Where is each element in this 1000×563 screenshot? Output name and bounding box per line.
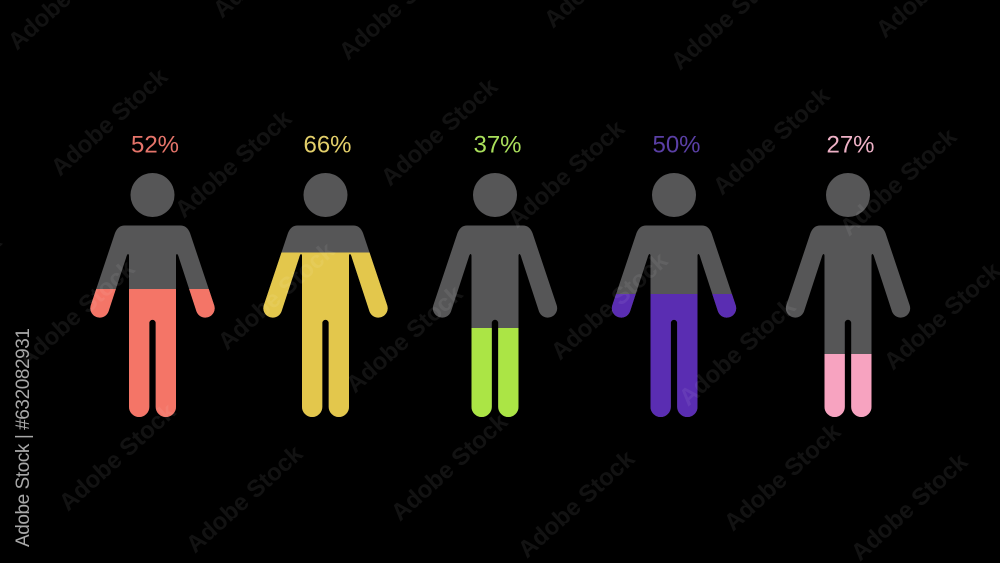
watermarks: Adobe Stock xyxy=(13,255,141,373)
body 3 base xyxy=(433,226,557,417)
head 2 xyxy=(304,173,348,217)
person 3: 37% xyxy=(433,132,557,417)
head 4 xyxy=(652,173,696,217)
watermarks: Adobe Stock xyxy=(503,115,631,233)
head 1 xyxy=(130,173,174,217)
label: 50%: 50% xyxy=(652,132,701,158)
head 5 xyxy=(826,173,870,217)
person 1: 52% xyxy=(90,132,215,417)
person 5: 27% xyxy=(786,132,910,417)
watermarks: Adobe Stock xyxy=(54,398,182,516)
side credit text: Adobe Stock | #632082931 xyxy=(13,328,34,547)
person 4: 50% xyxy=(612,132,736,417)
body 4 base xyxy=(612,226,736,417)
person 2: 66% xyxy=(263,132,388,417)
body 5 base xyxy=(786,226,910,417)
watermarks: Adobe Stock xyxy=(719,418,847,536)
watermarks: Adobe Stock xyxy=(513,445,641,563)
watermarks: Adobe Stock xyxy=(376,73,504,191)
body 1 base xyxy=(90,226,215,417)
watermarks: Adobe Stock xyxy=(846,448,974,563)
watermarks: Adobe Stock xyxy=(341,280,469,398)
body 2 base xyxy=(263,226,388,417)
label: 27%: 27% xyxy=(826,132,875,158)
watermarks: Adobe Stock xyxy=(674,293,802,411)
body 4 fill level xyxy=(612,294,736,417)
watermarks: Adobe Stock xyxy=(181,440,309,558)
watermarks: Adobe Stock xyxy=(170,105,298,223)
body 5 fill level xyxy=(824,354,872,417)
head 3 xyxy=(473,173,517,217)
label: 52%: 52% xyxy=(131,132,179,158)
body 2 fill level xyxy=(263,252,388,417)
label: 37%: 37% xyxy=(473,132,522,158)
watermarks: Adobe Stock xyxy=(46,63,174,181)
watermarks: Adobe Stock xyxy=(708,82,836,200)
label: 66%: 66% xyxy=(303,132,352,158)
watermarks: Adobe Stock xyxy=(546,247,674,365)
watermarks: Adobe Stock xyxy=(213,237,341,355)
watermarks: Adobe Stock xyxy=(386,408,514,526)
watermarks: Adobe Stock xyxy=(835,123,963,241)
body 1 fill level xyxy=(90,289,215,417)
body 3 fill level xyxy=(472,328,518,417)
